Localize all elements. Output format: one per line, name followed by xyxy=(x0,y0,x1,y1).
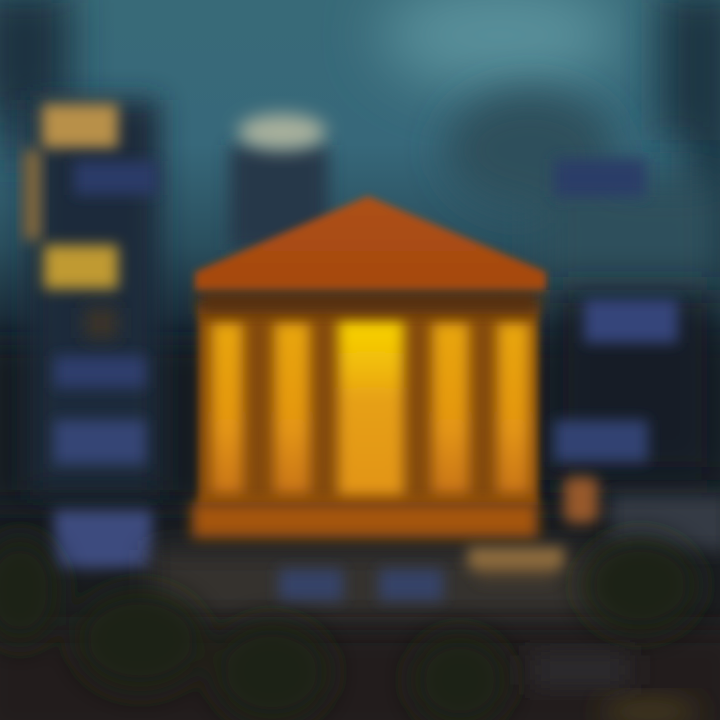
blue plaza sign: right xyxy=(379,569,443,601)
column 4 xyxy=(497,322,530,494)
small orange sign xyxy=(564,477,598,523)
blue label: bottom xyxy=(54,510,152,568)
tree: top right xyxy=(660,0,720,300)
blue label: lower xyxy=(54,420,146,464)
bush: centre right xyxy=(410,632,510,720)
ground highlight xyxy=(530,655,630,685)
sky glow xyxy=(380,0,620,90)
right pavement xyxy=(610,495,720,550)
blue label: top xyxy=(74,161,158,195)
brown patch xyxy=(85,308,117,338)
blue label: right lower xyxy=(554,420,648,462)
pediment roof xyxy=(195,196,546,290)
right dark building xyxy=(550,290,720,480)
column 1 xyxy=(211,322,243,494)
tower body xyxy=(230,145,328,250)
temple base xyxy=(192,502,538,538)
sign: upper tan block xyxy=(42,104,118,148)
flower glow: bottom right xyxy=(600,700,700,720)
foreground: dark ground strip xyxy=(0,630,720,720)
blue label: right middle xyxy=(584,299,678,343)
blue label: right top xyxy=(554,159,646,197)
left tower body xyxy=(30,100,160,490)
panel: centre tower xyxy=(230,114,328,250)
bush: centre left xyxy=(212,620,332,720)
bushes xyxy=(0,535,700,720)
temple wall xyxy=(198,305,538,505)
trees: right background xyxy=(445,90,720,320)
blue label: middle xyxy=(54,356,146,388)
tree: top left xyxy=(0,0,70,160)
bench xyxy=(468,547,564,582)
sign: lower yellow block xyxy=(44,245,118,289)
column 2 xyxy=(274,322,310,494)
bush: right xyxy=(580,535,700,635)
bush: far left xyxy=(0,535,62,645)
column 3 xyxy=(432,322,469,494)
panel: right labels xyxy=(554,159,678,462)
bush: left xyxy=(74,588,206,692)
panel: left building xyxy=(24,100,160,568)
centre door xyxy=(338,320,404,496)
ground: plaza xyxy=(150,495,720,620)
entablature shadow xyxy=(198,290,540,314)
blue plaza sign: left xyxy=(279,569,343,601)
panel: temple building xyxy=(192,196,546,538)
centre pavement xyxy=(150,550,620,620)
tower cap xyxy=(238,114,326,150)
dark city band behind the temple xyxy=(0,345,720,505)
sign: curved side stroke xyxy=(24,150,41,240)
